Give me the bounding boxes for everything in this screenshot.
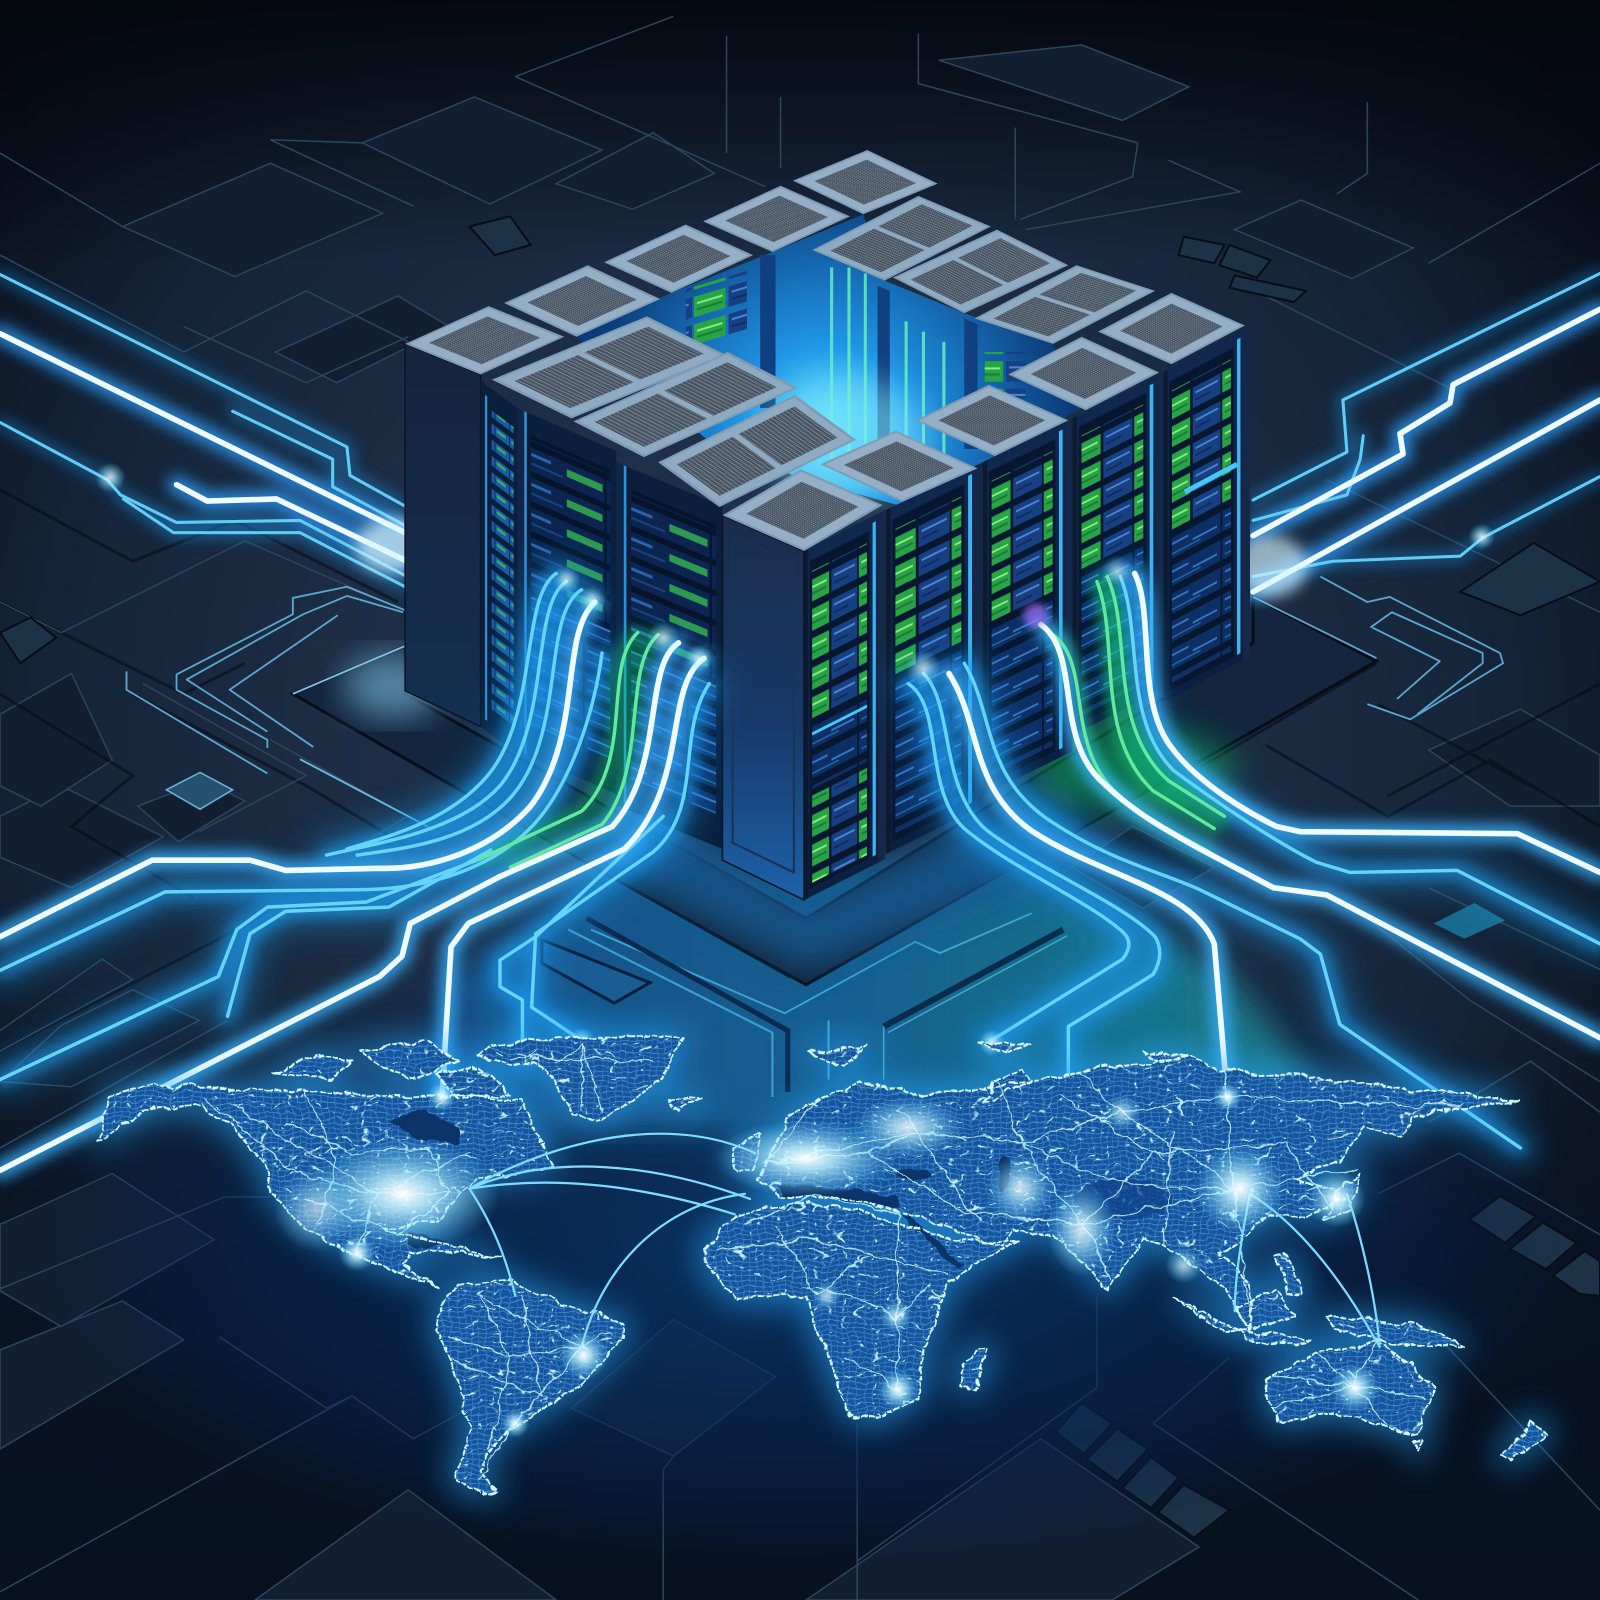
inland seas: [389, 1110, 1011, 1268]
rack: front corner plain side: [722, 515, 804, 900]
continent coastlines: [99, 1037, 1546, 1493]
rack tops: back row: [504, 150, 1155, 344]
server racks cluster: [405, 150, 1250, 900]
dark circuit channels: [0, 490, 1600, 1051]
dim basin in central Asia: [1073, 1179, 1171, 1219]
bright chip traces on floor: [127, 577, 1503, 828]
floor chevrons below racks: [542, 871, 1067, 1097]
rack faces: right row: [804, 327, 1250, 900]
fibre cables from racks: [0, 573, 1600, 1170]
stream glare at rack edges: [356, 519, 1307, 597]
rack tops: middle row: [405, 306, 856, 507]
rack faces: left row: [481, 381, 722, 849]
glowing world map: [99, 1037, 1546, 1493]
map ambient glow: [0, 959, 1600, 1600]
continents: [99, 1037, 1546, 1493]
server platform: [293, 597, 1377, 985]
city hot spots: [273, 1083, 1380, 1438]
network connections on land: [204, 1043, 1459, 1480]
rack: far left plain side: [405, 344, 481, 727]
rack tops: front row: [722, 293, 1245, 551]
floor chips: [166, 772, 1505, 939]
map glow layer: [99, 1037, 1546, 1493]
land masses with rough coastlines: [99, 1037, 1546, 1493]
data streams: left and right of the racks: [0, 273, 1600, 592]
ocean arcs between continents: [469, 1134, 1380, 1347]
glowing core between racks: [577, 214, 1082, 505]
cable connector glints: [95, 462, 1495, 1056]
lit floor between cables: [439, 867, 1316, 1133]
